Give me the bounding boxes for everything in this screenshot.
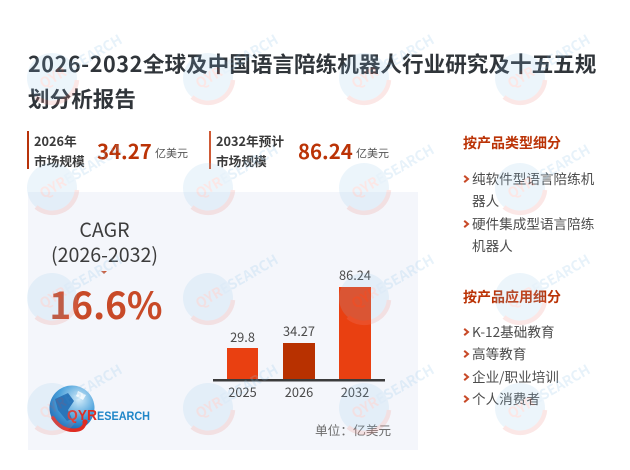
heading: by application: 按产品应用细分 — [463, 287, 561, 307]
bar chart: 34.27 — [283, 321, 315, 340]
stat: 2032 forecast market size — [209, 131, 389, 170]
watermark overlay: QYRESEARCH — [348, 30, 438, 93]
list: applications: 个人消费者 — [472, 388, 540, 408]
list: product types: 纯软件型语言陪练机 — [472, 168, 594, 188]
watermark overlay: QYRESEARCH — [348, 140, 438, 203]
stat: 2026 market size: 亿美元 — [155, 145, 188, 161]
panel: product type segmentation — [463, 133, 594, 255]
CAGR label: CAGR — [79, 214, 130, 243]
watermark overlay: QYRESEARCH — [192, 360, 282, 423]
stat: 2026 market size: 2026年 — [34, 131, 77, 150]
bar: 2025 — [227, 348, 258, 380]
stat: 2032 forecast market size: 亿美元 — [356, 145, 389, 161]
stat: 2026 market size: 市场规模 — [34, 151, 85, 170]
stat: 2026 market size: 34.27 — [97, 135, 152, 165]
watermark overlay: QYRESEARCH — [36, 140, 126, 203]
logo: QYResearch: ESEARCH — [97, 411, 150, 423]
list: product types: 机器人 — [472, 235, 513, 255]
list: product types — [464, 168, 594, 255]
stat: 2032 forecast market size: 86.24 — [298, 135, 353, 165]
CAGR label: (2026-2032) — [51, 239, 158, 268]
bar chart: 29.8 — [230, 327, 255, 346]
CAGR label — [51, 214, 158, 268]
watermark overlay: QYRESEARCH — [36, 30, 126, 93]
panel: chart background — [28, 192, 418, 450]
watermark overlay: QYRESEARCH — [36, 360, 126, 423]
bar: 2026 — [283, 343, 315, 380]
stat: 2032 forecast market size: 市场规模 — [216, 151, 267, 170]
stat: 2032 forecast market size: 2032年预计 — [216, 131, 284, 150]
watermark overlay: QYRESEARCH — [504, 360, 594, 423]
panel: application segmentation — [463, 287, 561, 408]
bar: 2032 — [339, 287, 371, 380]
bar chart: 86.24 — [339, 265, 371, 284]
watermark overlay: QYRESEARCH — [192, 30, 282, 93]
watermark overlay: QYRESEARCH — [504, 250, 594, 313]
list: product types: 器人 — [472, 190, 499, 210]
list: applications: K-12基础教育 — [472, 321, 555, 341]
watermark overlay: QYRESEARCH — [504, 140, 594, 203]
logo: QYResearch — [50, 386, 150, 432]
bar chart: 2032 — [341, 382, 369, 401]
watermark overlay: QYRESEARCH — [192, 140, 282, 203]
watermark overlay: QYRESEARCH — [348, 250, 438, 313]
heading: by product type: 按产品类型细分 — [463, 133, 561, 153]
bar chart: 2025 — [228, 382, 257, 401]
watermark overlay: QYRESEARCH — [348, 360, 438, 423]
list: product types: 硬件集成型语言陪练 — [472, 213, 594, 233]
icon: small down marker — [101, 271, 107, 274]
list: applications: 高等教育 — [472, 343, 526, 363]
bar chart — [213, 265, 391, 439]
title: 2026-2032全球及中国语言陪练机器人行业研究及十五五规划分析报告 — [28, 48, 596, 114]
watermark overlay: QYRESEARCH — [504, 30, 594, 93]
watermark overlay: QYRESEARCH — [192, 250, 282, 313]
stat: 2026 market size — [27, 131, 188, 170]
unit label: 单位：亿美元 — [315, 420, 391, 439]
CAGR value: 16.6% — [49, 276, 163, 330]
axis — [213, 379, 385, 382]
watermark overlay: QYRESEARCH — [36, 250, 126, 313]
list: applications: 企业/职业培训 — [472, 366, 559, 386]
logo: QYResearch: QYR — [67, 407, 97, 424]
list: applications — [464, 321, 559, 408]
bar chart: 2026 — [285, 382, 313, 401]
